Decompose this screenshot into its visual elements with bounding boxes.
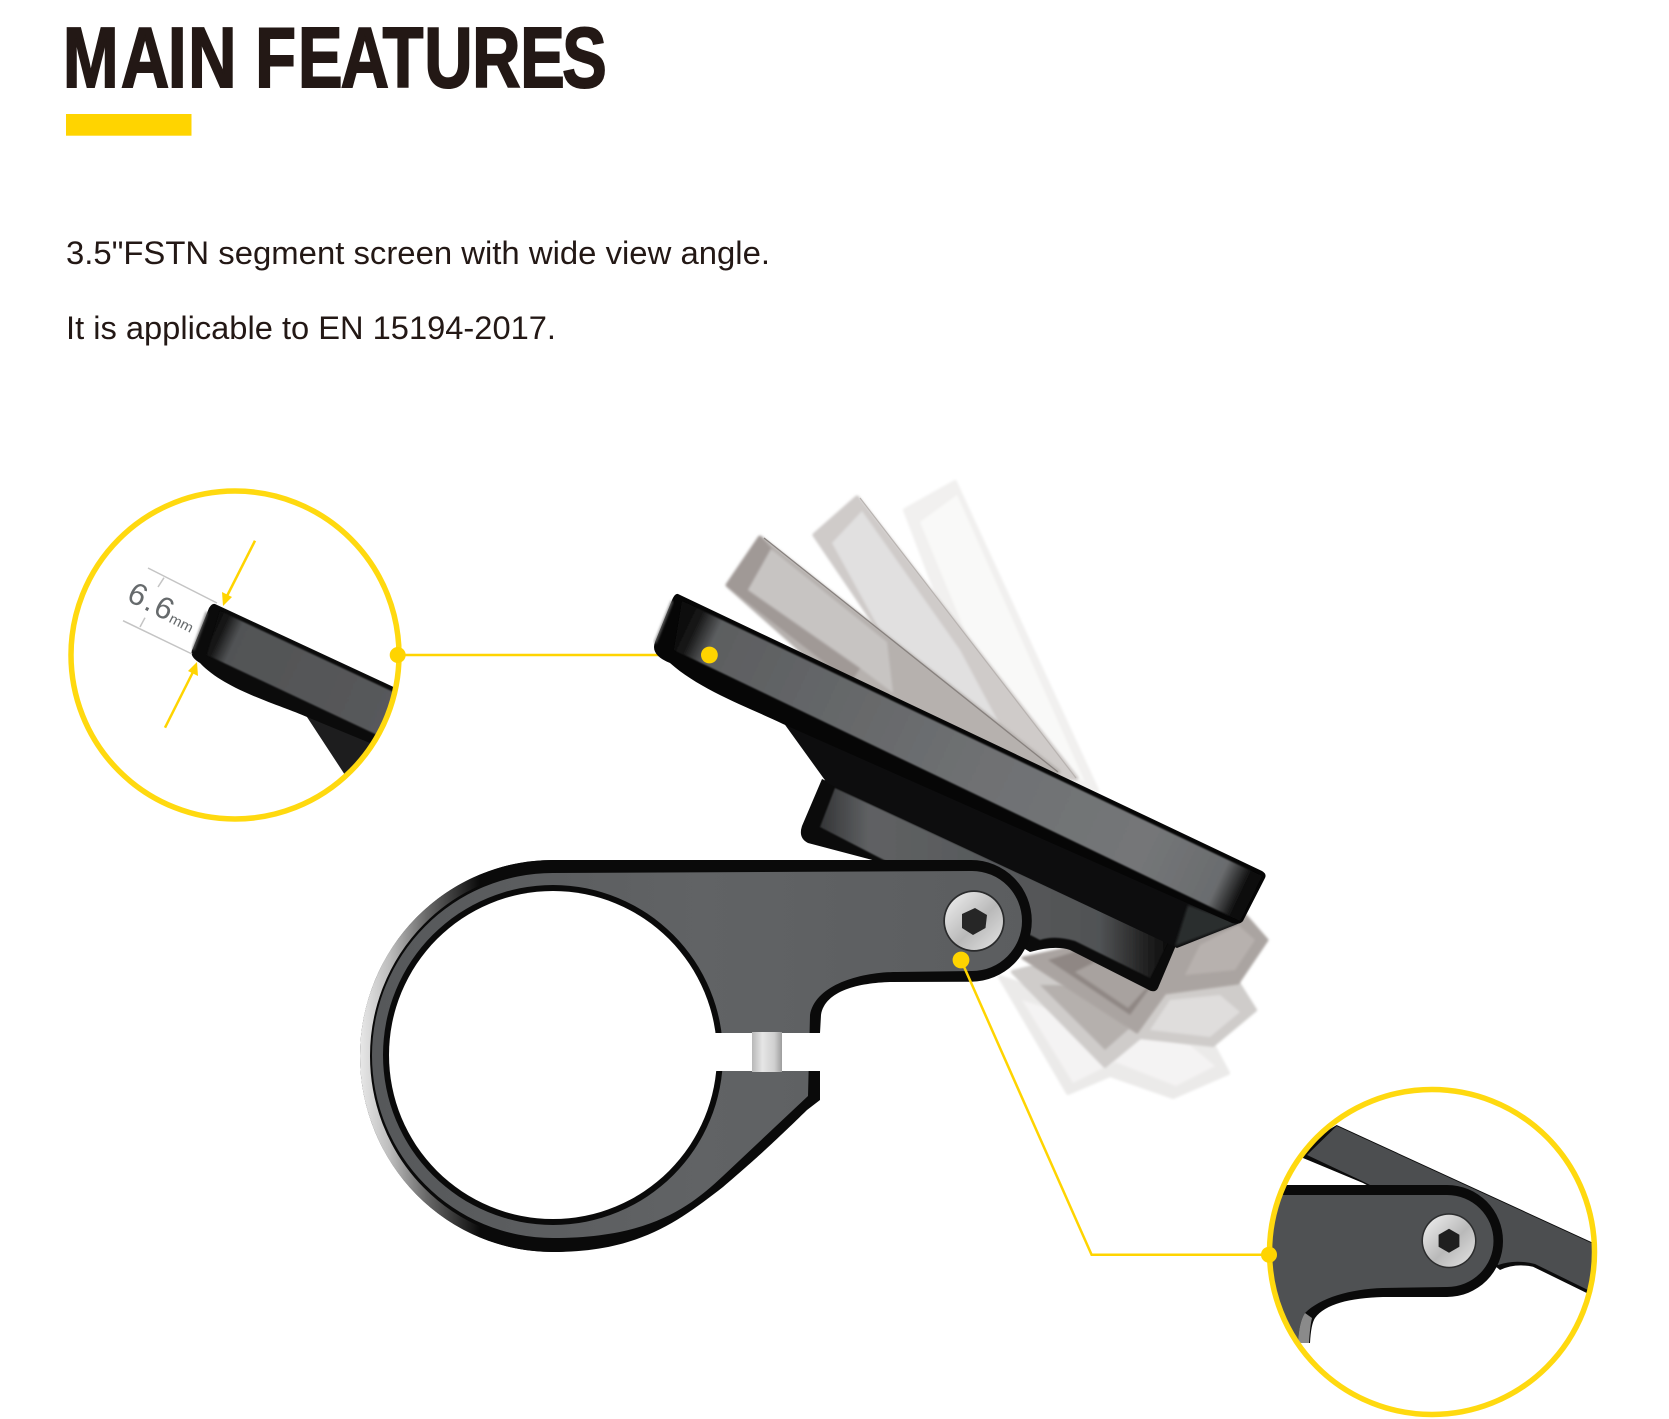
enlarged pivot	[1260, 1125, 1600, 1343]
mount bracket	[801, 779, 1177, 991]
bolt	[1422, 1213, 1476, 1268]
display screen	[654, 594, 1266, 924]
feature text: screen: 3.5"FSTN segment screen with wide view angle.	[66, 235, 770, 271]
product: display mounted on clamp	[360, 594, 1266, 1252]
arm face	[1260, 1195, 1494, 1343]
ghost position 3	[905, 482, 1228, 1097]
clamp pin	[752, 1032, 782, 1072]
clamp hole	[383, 885, 723, 1225]
enlarged screen edge	[192, 604, 400, 775]
callout ring	[71, 491, 399, 819]
title accent bar	[66, 114, 192, 136]
ghost rotation positions of the screen	[728, 482, 1267, 1097]
marker dot: ring	[390, 647, 406, 663]
clamp slit	[700, 1033, 830, 1071]
arm black edge	[1260, 1185, 1503, 1343]
marker dot: ring	[1261, 1247, 1277, 1263]
connector: screen to thickness callout	[398, 654, 709, 656]
ghost position 2	[815, 498, 1255, 1066]
bracket band	[1295, 1125, 1600, 1298]
marker dot: bolt	[953, 952, 969, 968]
dimension guide lines	[123, 568, 217, 654]
title: MAIN FEATURES	[63, 11, 607, 106]
arrow: top	[222, 541, 255, 606]
callout: pivot bolt	[1260, 1090, 1600, 1414]
arm tip highlight	[1298, 1313, 1312, 1343]
feature text: standard: It is applicable to EN 15194-2017.	[66, 310, 556, 346]
marker dot: screen	[701, 647, 718, 663]
dimension value: 6.6	[122, 575, 180, 627]
ghost position 1	[728, 538, 1267, 1032]
arrow: bottom	[165, 662, 198, 728]
callout: 6.6 mm thickness	[71, 491, 406, 819]
dimension value	[122, 575, 203, 639]
callout ring	[1270, 1090, 1594, 1414]
connector: bolt to pivot callout	[961, 960, 1269, 1255]
dimension value: mm	[167, 610, 196, 636]
clamp body	[360, 860, 1032, 1252]
hex bolt	[943, 890, 1005, 952]
silver rim highlight	[365, 865, 741, 1247]
screen underside wedge	[783, 722, 1240, 948]
